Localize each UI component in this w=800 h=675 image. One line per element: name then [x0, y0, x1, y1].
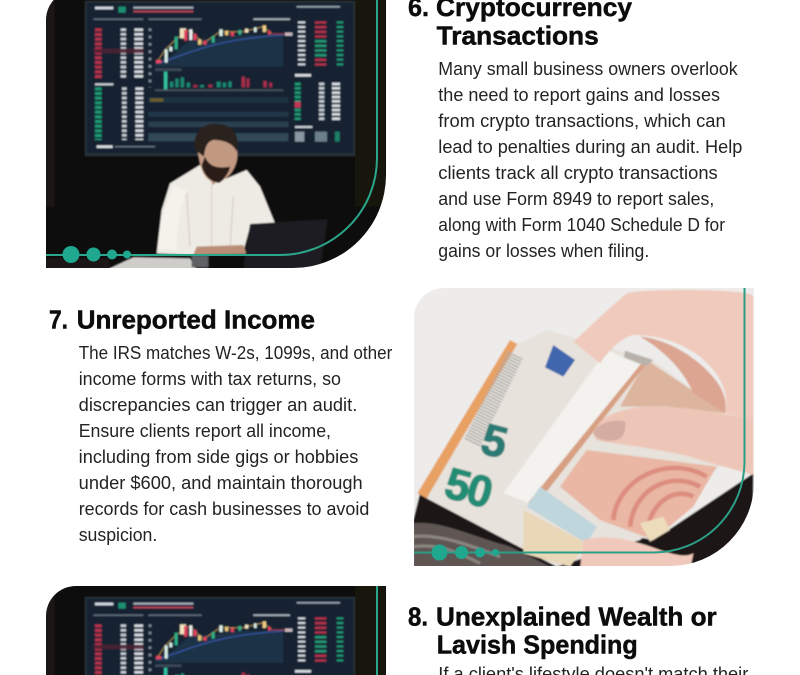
accent dots	[432, 544, 499, 560]
text block: section 6 body: the need to report gains and losses	[438, 85, 720, 105]
accent line	[414, 288, 744, 552]
text block: section 6 body	[438, 59, 742, 261]
heading: section 7: Unreported Income	[77, 304, 315, 334]
text block: section 7 body: including from side gigs or hobbies	[79, 447, 358, 467]
panel: section 7 photo	[413, 287, 757, 570]
panel: section 6 photo	[43, 0, 390, 273]
heading: section 8: 8.	[408, 602, 428, 632]
heading: section 6	[408, 0, 633, 50]
accent line	[46, 0, 377, 255]
accent line	[376, 586, 378, 675]
photo: trader at screens	[43, 0, 390, 273]
text block: section 6 body: Many small business owners overlook	[438, 59, 739, 79]
text block: section 7 body: income forms with tax returns, so	[79, 369, 341, 389]
text block: section 6 body: along with Form 1040 Schedule D for	[438, 215, 725, 235]
panel: section 8 photo	[43, 583, 390, 675]
heading: section 7: 7.	[49, 304, 68, 334]
text block: section 7 body	[79, 343, 392, 545]
text block: section 7 body: under $600, and maintain thorough	[79, 473, 363, 493]
text block: section 6 body: gains or losses when filing.	[438, 241, 649, 261]
heading: section 6: Transactions	[437, 20, 599, 50]
text block: section 6 body: lead to penalties during an audit. Help	[438, 137, 742, 157]
text block: section 7 body: discrepancies can trigger an audit.	[79, 395, 357, 415]
text block: section 6 body: and use Form 8949 to report sales,	[438, 189, 714, 209]
heading: section 8: Unexplained Wealth or	[436, 602, 717, 632]
text block: section 6 body: clients track all crypto transactions	[438, 163, 718, 183]
text block: section 6 body: from crypto transactions, which can	[438, 111, 726, 131]
accent dots	[62, 246, 131, 263]
text block: section 7 body: records for cash businesses to avoid	[79, 499, 369, 519]
photo: hand holding euro notes	[413, 287, 757, 570]
heading: section 8: Lavish Spending	[437, 630, 638, 660]
photo: trader at screens (cropped)	[43, 583, 390, 675]
text block: section 7 body: The IRS matches W-2s, 1099s, and other	[79, 343, 392, 363]
text block: section 7 body: Ensure clients report all income,	[79, 421, 331, 441]
text block: section 7 body: suspicion.	[79, 525, 157, 545]
heading: section 8	[408, 602, 717, 660]
